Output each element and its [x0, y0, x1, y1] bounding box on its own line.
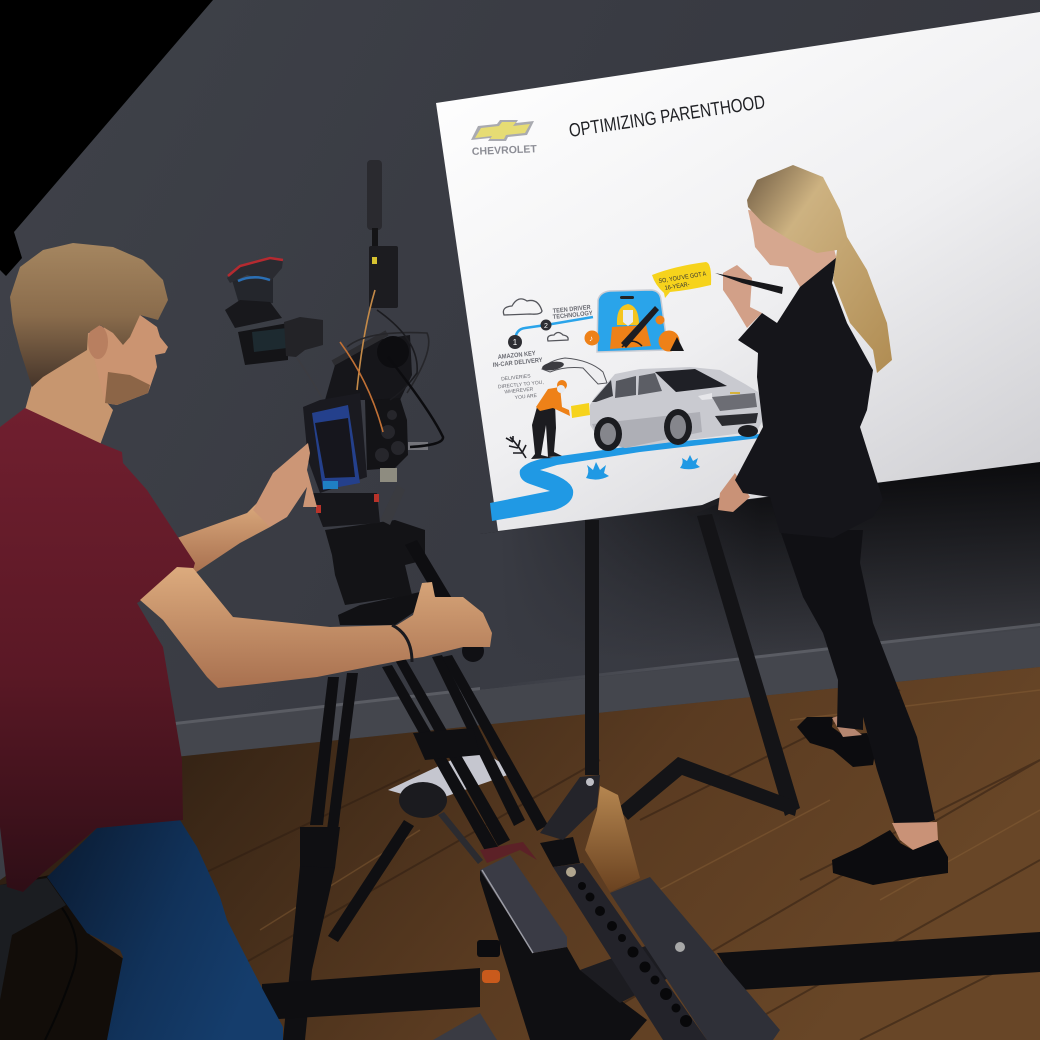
right side connector block	[365, 398, 408, 470]
antenna	[367, 160, 382, 230]
orange rail clip	[482, 970, 500, 983]
label: amazon key: IN-CAR DELIVERY	[492, 357, 544, 369]
label: deliveries: DELIVERIES	[501, 373, 532, 383]
baseboard	[175, 624, 1040, 757]
baseplate	[310, 493, 380, 527]
monitor housing	[238, 323, 288, 365]
operator: ear	[88, 325, 108, 359]
operator: jeans	[47, 820, 283, 1040]
step 2 marker	[540, 320, 552, 330]
woman: ankle	[892, 822, 938, 850]
woman drawing on the board	[686, 165, 948, 885]
whiteboard drawing	[471, 92, 767, 521]
shadow fade toward the left	[480, 498, 760, 690]
viewfinder lens	[232, 278, 273, 307]
transmitter led	[372, 257, 377, 264]
markers in lower hand	[686, 493, 732, 516]
label: deliveries: YOU ARE	[515, 393, 538, 401]
blue display	[312, 405, 360, 490]
bracket bolt	[675, 942, 685, 952]
operator: wrist band	[392, 625, 412, 662]
operator: near arm on panhandle	[140, 567, 492, 688]
operator: far hand	[253, 443, 317, 527]
woman: front shoe	[832, 830, 948, 885]
Chevrolet logo: CHEVROLET	[472, 143, 538, 158]
label: teen driver technology: TECHNOLOGY	[552, 310, 594, 321]
black fern	[506, 436, 526, 458]
speech bubble	[652, 262, 711, 298]
paper on the floor	[388, 748, 516, 802]
Chevrolet logo	[471, 120, 538, 158]
operator: beard	[105, 372, 150, 405]
orange and black cables	[297, 290, 443, 447]
wooden floor	[0, 667, 1040, 1040]
eyecup	[227, 258, 283, 283]
slider arm bolt	[586, 778, 594, 786]
baseboard highlight	[175, 623, 1040, 725]
shadow under the board	[480, 462, 1040, 690]
woman: trousers	[780, 530, 935, 832]
woman: hair and ponytail	[747, 165, 892, 373]
blue road	[490, 434, 760, 521]
tripod legs	[283, 655, 548, 1040]
grey wall patch behind operator	[0, 878, 66, 1000]
antenna stem	[372, 228, 378, 248]
spreader strut	[438, 812, 483, 864]
whiteboard panel	[436, 12, 1040, 531]
tripod panhandle	[405, 540, 480, 652]
perforated plate	[553, 863, 707, 1040]
slider mount	[540, 837, 580, 867]
operator: hair	[10, 243, 168, 387]
label: teen driver technology: TEEN DRIVER	[552, 304, 591, 315]
woman: lower hand	[718, 473, 750, 512]
monitor screen	[252, 328, 287, 352]
monitor mount	[284, 317, 323, 357]
wooden handle	[585, 786, 640, 892]
label: amazon key	[492, 350, 544, 369]
cage and hardware	[325, 335, 412, 400]
woman: rear shoe	[797, 717, 875, 767]
slider right plate	[610, 877, 780, 1040]
operator: neck	[25, 333, 113, 445]
label: deliveries: WHEREVER	[504, 386, 534, 395]
camera operator	[0, 243, 492, 1040]
rail knob	[477, 940, 500, 957]
joystick rosette	[377, 336, 409, 368]
whiteboard stand	[585, 514, 800, 820]
XLR plate	[380, 468, 397, 482]
step 2 marker: 2	[544, 323, 548, 330]
silver connector	[408, 442, 428, 450]
floor cable	[45, 908, 77, 1040]
board title: OPTIMIZING PARENTHOOD	[568, 92, 767, 142]
step 1 marker: 1	[513, 338, 518, 347]
bottom battery	[433, 1013, 497, 1040]
woman: neck and face	[748, 210, 837, 287]
operator: face	[88, 315, 168, 405]
label: teen driver technology	[552, 304, 594, 321]
woman: raised hand	[723, 265, 762, 328]
speech bubble: 16-YEAR-	[664, 281, 690, 292]
dark corner at the lower left	[0, 875, 125, 1040]
tripod bowl	[338, 592, 420, 625]
tailgate dark panel	[541, 360, 565, 372]
slider arm	[540, 775, 600, 840]
speech bubble: SO, YOU'VE GOT A	[658, 270, 707, 285]
right side connectors	[375, 410, 405, 462]
raised tailgate outline	[542, 358, 607, 384]
operator: far arm	[177, 500, 270, 573]
black flag in the top-left corner	[0, 0, 213, 276]
yellow package	[571, 403, 590, 418]
side bracket	[580, 937, 697, 1003]
mounting plate rod	[380, 485, 405, 525]
label: amazon key: AMAZON KEY	[497, 350, 537, 361]
label: deliveries	[498, 373, 544, 401]
maroon strap	[480, 842, 537, 863]
camera rig	[225, 160, 484, 662]
blue lens ring	[238, 277, 270, 281]
delivery worker	[531, 380, 570, 459]
marker	[715, 273, 783, 294]
top rod	[333, 333, 387, 363]
transmitter box	[369, 246, 398, 308]
flip monitor	[225, 300, 282, 328]
blue timeline	[515, 317, 593, 340]
woman: jacket	[735, 257, 883, 538]
operator: T-shirt	[0, 408, 195, 892]
label: deliveries: DIRECTLY TO YOU,	[498, 380, 544, 390]
orange alert icons	[584, 316, 684, 352]
slider rails	[262, 932, 1040, 1020]
camera body	[303, 393, 367, 493]
silver SUV	[590, 367, 764, 451]
dark display panel	[315, 418, 355, 478]
clouds	[503, 299, 568, 341]
blue plants	[586, 455, 700, 480]
woman: rear ankle	[832, 716, 862, 737]
teen driver window	[597, 290, 668, 352]
orange alert icons: ♪	[589, 334, 593, 343]
step 1 marker	[508, 335, 522, 349]
slider motor box	[480, 855, 647, 1040]
panhandle grip end	[462, 640, 484, 662]
bright blue button	[323, 481, 338, 489]
red release buttons	[316, 494, 379, 513]
tripod spreader knob	[399, 782, 447, 818]
tripod head	[325, 520, 425, 605]
